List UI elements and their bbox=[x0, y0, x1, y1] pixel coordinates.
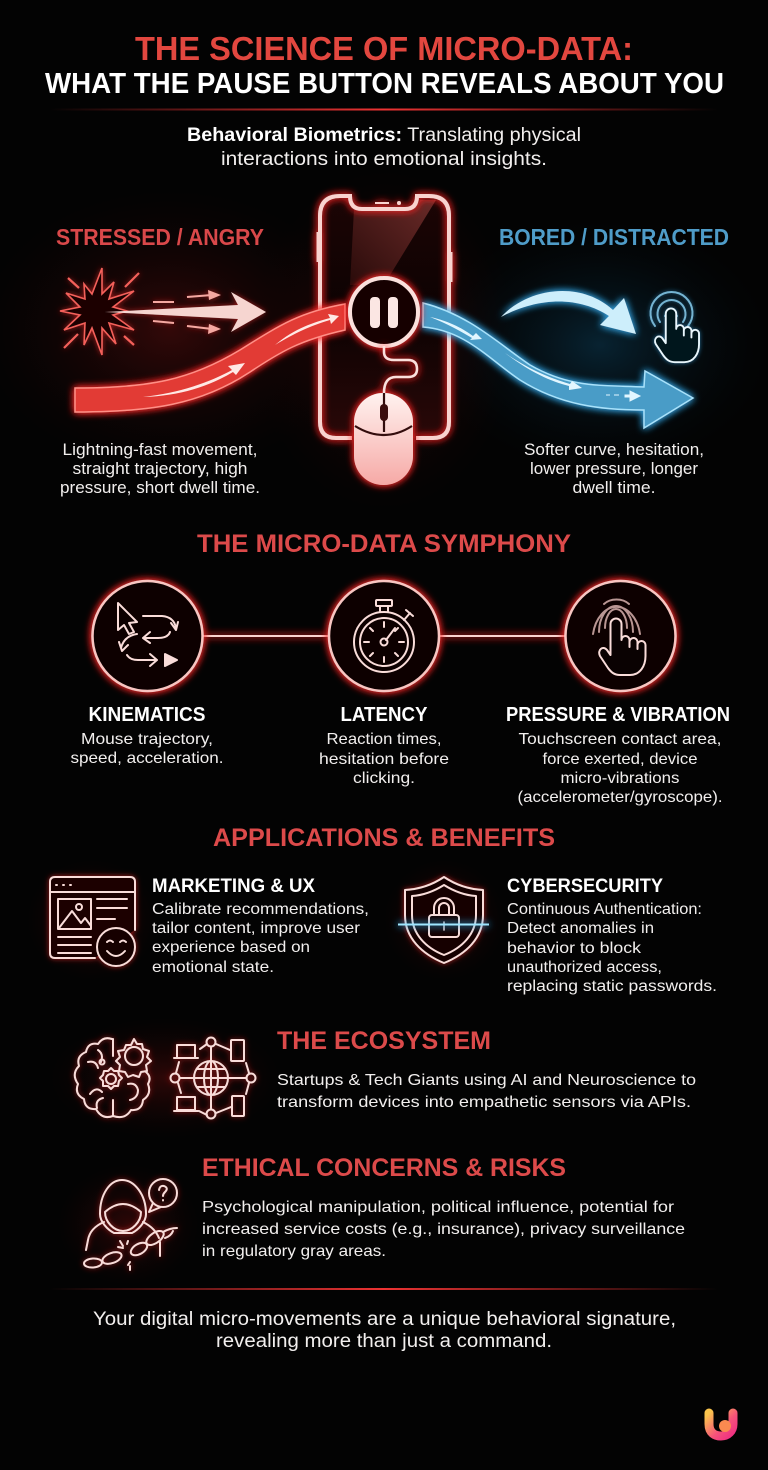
cybersecurity text: CYBERSECURITY bbox=[507, 875, 663, 897]
phone bbox=[318, 196, 451, 438]
icon: stopwatch bbox=[329, 581, 439, 691]
latency text: LATENCY bbox=[340, 704, 428, 726]
cybersecurity text bbox=[507, 875, 717, 995]
heading: ecosystem: THE ECOSYSTEM bbox=[277, 1027, 491, 1055]
connector line bbox=[203, 635, 565, 637]
cybersecurity text: unauthorized access, bbox=[507, 959, 662, 976]
icon: curved blue arrow bbox=[501, 291, 636, 334]
marketing text: experience based on bbox=[152, 939, 310, 956]
label: bored: BORED / DISTRACTED bbox=[499, 224, 729, 250]
marketing text: MARKETING & UX bbox=[152, 875, 315, 897]
text: bored description: Softer curve, hesitation, bbox=[524, 441, 704, 459]
subtitle: interactions into emotional insights. bbox=[221, 149, 547, 170]
ecosystem text: Startups & Tech Giants using AI and Neuroscience to bbox=[277, 1072, 696, 1089]
pressure text bbox=[506, 704, 730, 806]
icon: marketing window bbox=[50, 877, 135, 966]
pressure text: PRESSURE & VIBRATION bbox=[506, 704, 730, 726]
icon: security shield bbox=[398, 877, 489, 963]
kinematics text bbox=[70, 704, 224, 767]
marketing text bbox=[152, 875, 369, 976]
title: WHAT THE PAUSE BUTTON REVEALS ABOUT YOU bbox=[45, 68, 724, 100]
text: bored description: dwell time. bbox=[572, 479, 656, 497]
text: stressed description: pressure, short dwell time. bbox=[60, 479, 260, 497]
latency text: Reaction times, bbox=[326, 731, 442, 748]
text: bored description: lower pressure, longer bbox=[530, 460, 699, 478]
subtitle bbox=[187, 125, 581, 170]
latency text: hesitation before bbox=[319, 751, 449, 768]
icon: device network globe bbox=[170, 1038, 256, 1118]
heading: ethical concerns: ETHICAL CONCERNS & RISKS bbox=[202, 1154, 566, 1182]
pause button bbox=[350, 278, 418, 346]
ethical text: Psychological manipulation, political influence, potential for bbox=[202, 1199, 675, 1216]
marketing text: tailor content, improve user bbox=[152, 920, 361, 937]
pressure text: Touchscreen contact area, bbox=[518, 731, 722, 748]
icon: brain with gears bbox=[75, 1038, 151, 1117]
footer statement: Your digital micro-movements are a unique behavioral signature, bbox=[93, 1309, 676, 1330]
cybersecurity text: Continuous Authentication: bbox=[507, 901, 702, 918]
pressure text: (accelerometer/gyroscope). bbox=[518, 789, 722, 806]
text: stressed description: Lightning-fast movement, bbox=[62, 441, 258, 459]
cybersecurity text: Detect anomalies in bbox=[507, 920, 654, 937]
cybersecurity text: behavior to block bbox=[507, 940, 641, 957]
footer statement bbox=[93, 1309, 676, 1352]
kinematics text: speed, acceleration. bbox=[70, 750, 224, 767]
latency text: clicking. bbox=[353, 770, 415, 787]
ethical text: increased service costs (e.g., insurance), privacy surveillance bbox=[202, 1221, 685, 1238]
icon: kinematics bbox=[92, 581, 202, 691]
text: bored description bbox=[524, 441, 704, 497]
label: stressed: STRESSED / ANGRY bbox=[56, 224, 264, 250]
text: stressed description: straight trajectory, high bbox=[72, 460, 247, 478]
mouse with cord bbox=[354, 346, 417, 485]
text: stressed description bbox=[60, 441, 260, 497]
cybersecurity text: replacing static passwords. bbox=[507, 978, 717, 995]
marketing text: Calibrate recommendations, bbox=[152, 901, 369, 918]
blue trajectory arrow bbox=[423, 303, 693, 428]
ecosystem text: transform devices into empathetic sensors via APIs. bbox=[277, 1094, 691, 1111]
heading: symphony: THE MICRO-DATA SYMPHONY bbox=[197, 530, 571, 558]
ecosystem text bbox=[277, 1072, 696, 1111]
footer statement: revealing more than just a command. bbox=[216, 1331, 552, 1352]
pressure text: force exerted, device bbox=[542, 751, 698, 768]
ethical text bbox=[202, 1199, 685, 1260]
kinematics text: Mouse trajectory, bbox=[81, 731, 213, 748]
icon: blue touch hand bbox=[651, 292, 699, 362]
subtitle: Behavioral Biometrics: Translating physical bbox=[187, 125, 581, 146]
ethical text: in regulatory gray areas. bbox=[202, 1243, 386, 1260]
icon: starburst with speed arrow bbox=[60, 268, 266, 355]
red trajectory ribbon bbox=[75, 304, 345, 412]
pressure text: micro-vibrations bbox=[560, 770, 680, 787]
title bbox=[45, 30, 724, 100]
latency text bbox=[319, 704, 449, 787]
icon: hooded figure and broken chain bbox=[84, 1179, 177, 1270]
heading: applications: APPLICATIONS & BENEFITS bbox=[213, 824, 555, 852]
kinematics text: KINEMATICS bbox=[88, 704, 206, 726]
icon: touch pressure bbox=[566, 581, 676, 691]
marketing text: emotional state. bbox=[152, 959, 274, 976]
title: THE SCIENCE OF MICRO-DATA: bbox=[135, 30, 633, 67]
logo bbox=[709, 1413, 733, 1436]
